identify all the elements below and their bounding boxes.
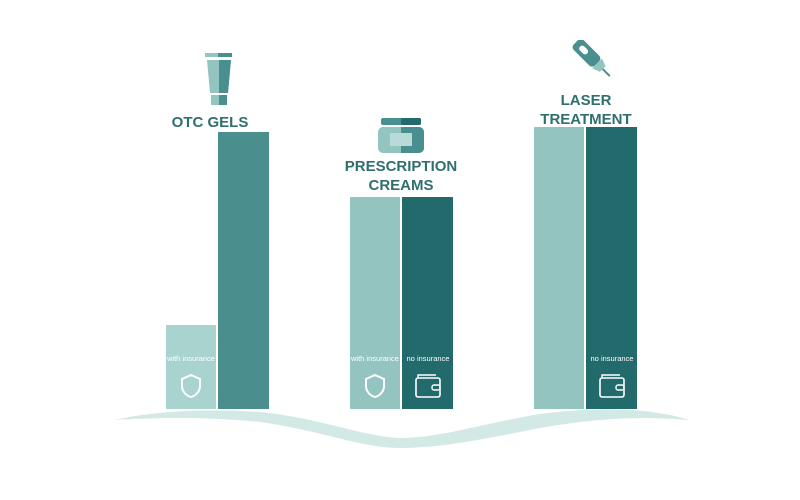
bar: laser with insurance: [534, 127, 584, 409]
title: LASER TREATMENT: TREATMENT: [540, 111, 632, 128]
title: OTC GELS: OTC GELS: [172, 114, 248, 131]
bar: prescription with insurance: with insurance: [351, 354, 399, 363]
bar: OTC with insurance: with insurance: [167, 354, 215, 363]
title: PRESCRIPTION CREAMS: [345, 158, 457, 194]
bar: OTC no insurance: [218, 132, 269, 409]
icon: laser pen: [572, 40, 610, 77]
bar: laser no insurance: no insurance: [591, 354, 633, 363]
icon: tube: [205, 53, 232, 105]
bar: prescription no insurance: [402, 197, 453, 409]
bar: OTC with insurance: [166, 325, 216, 409]
title: LASER TREATMENT: [540, 92, 632, 128]
title: LASER TREATMENT: LASER: [561, 92, 611, 109]
title: PRESCRIPTION CREAMS: PRESCRIPTION: [345, 158, 457, 175]
title: PRESCRIPTION CREAMS: CREAMS: [368, 177, 434, 194]
bar: laser no insurance: [586, 127, 637, 409]
bar: prescription no insurance: no insurance: [407, 354, 449, 363]
bar: prescription with insurance: [350, 197, 400, 409]
icon: jar: [378, 118, 424, 153]
